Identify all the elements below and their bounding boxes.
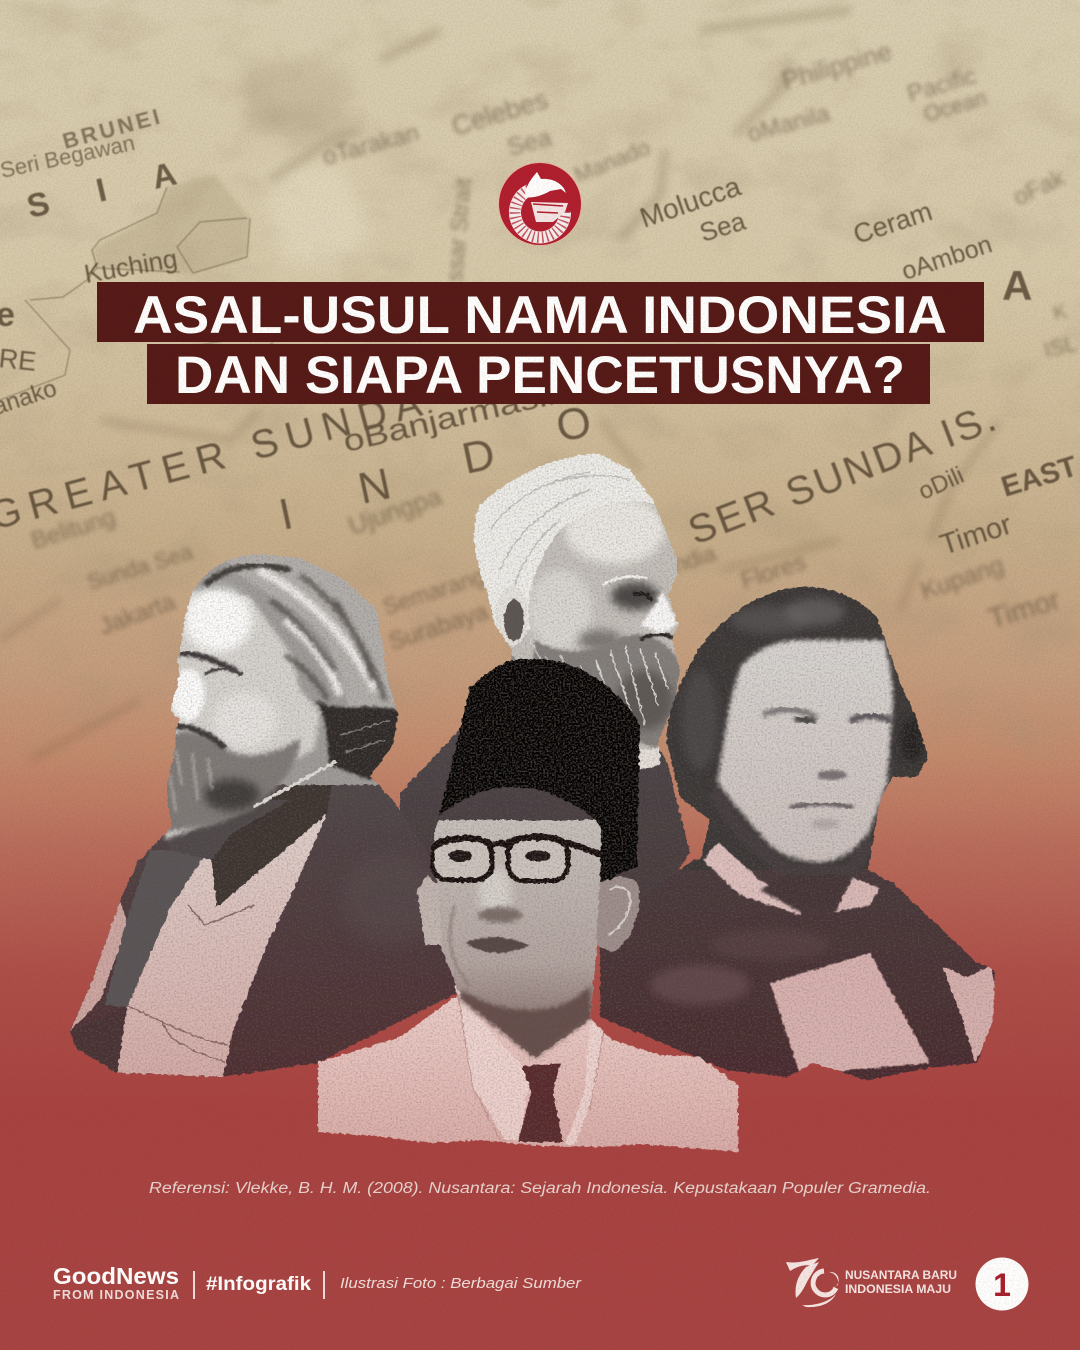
blurred map labels: Kupang: [917, 551, 1007, 606]
theme text: INDONESIA MAJU: [845, 1284, 951, 1296]
title: [97, 282, 984, 405]
logo: red circle with Garuda G: [498, 162, 582, 246]
blurred map labels: ISL: [1041, 331, 1079, 363]
footer left: brand and tags: [53, 1263, 582, 1302]
brand logotype: GoodNews: [53, 1263, 179, 1289]
blurred map labels: Philippine: [778, 36, 895, 96]
sharp map labels: Molucca: [636, 170, 745, 234]
footer right: anniversary logo and theme: [786, 1258, 957, 1307]
portrait: back centre man with white hair and beard: [400, 452, 690, 901]
sharp map labels: Kuching: [82, 243, 180, 289]
peci hat: [425, 659, 640, 882]
blurred map labels: Sea: [504, 123, 555, 162]
portrait: left man in profile with beard: [60, 545, 470, 1085]
sharp map labels: S I A: [23, 150, 199, 225]
blurred map labels: Flores: [738, 548, 809, 595]
white suit: [310, 985, 745, 1155]
blurred map labels: Ujungpa: [344, 481, 446, 541]
brand logotype: [53, 1263, 179, 1302]
blurred map labels: ssar Strait: [441, 176, 476, 282]
sharp map labels: [0, 103, 1080, 562]
neck and face: [433, 820, 605, 1058]
blurred map labels: Semarang: [380, 562, 488, 620]
blurred map labels: Timor: [985, 584, 1064, 636]
blurred map labels: Pacific: [904, 62, 980, 108]
blurred map labels: oManila: [745, 100, 833, 148]
sharp map labels: O: [552, 397, 596, 452]
portrait: right man with dark hair: [595, 580, 1000, 1085]
page number badge: 1: [993, 1267, 1011, 1303]
sharp map labels: oBanjarmasin: [340, 375, 570, 459]
blurred map labels: India: [664, 540, 719, 580]
reference citation: Referensi: Vlekke, B. H. M. (2008). Nusantara: Sejarah Indonesia. Kepustakaan Populer Gramedia.: [149, 1180, 931, 1197]
sharp map labels: Sea: [696, 205, 750, 248]
title bar: line 1: [97, 282, 984, 342]
blurred map labels: Belitung: [28, 504, 119, 555]
blurred map labels: oTarakan: [320, 119, 422, 171]
page number badge: [976, 1258, 1028, 1310]
brand logotype: FROM INDONESIA: [53, 1288, 179, 1302]
sharp map labels: A: [1002, 262, 1032, 309]
sharp map labels: oAmbon: [898, 230, 995, 286]
sharp map labels: N: [354, 459, 395, 514]
sharp map labels: BRUNEI: [60, 103, 165, 154]
blurred map labels: Ocean: [920, 85, 990, 127]
sharp map labels: I: [275, 489, 297, 540]
glasses: [432, 836, 602, 881]
sharp map labels: D: [458, 429, 499, 484]
hashtag: #Infografik: [206, 1274, 311, 1295]
theme text: NUSANTARA BARU: [845, 1270, 957, 1282]
blurred map labels: [28, 36, 1079, 656]
title line 2: DAN SIAPA PENCETUSNYA?: [175, 346, 905, 405]
blurred map labels: Manado: [571, 135, 654, 188]
sharp map labels: Ceram: [850, 196, 936, 250]
sharp map labels: Seri Begawan: [0, 130, 137, 183]
blurred map labels: Celebes: [448, 84, 551, 142]
blurred map labels: K: [1051, 300, 1070, 325]
map labels: [0, 36, 1080, 656]
necktie: [518, 1064, 563, 1142]
blurred map labels: Sunda Sea: [84, 539, 196, 595]
blurred map labels: Jakarta: [96, 588, 180, 641]
sharp map labels: Timor: [936, 509, 1016, 562]
title bar: line 2: [147, 344, 930, 404]
portrait collage: [60, 450, 1000, 1155]
title line 1: ASAL-USUL NAMA INDONESIA: [133, 286, 947, 345]
portrait: front man with peci and glasses: [310, 659, 745, 1155]
blurred map labels: Surabaya: [386, 598, 492, 656]
photo credit: Ilustrasi Foto : Berbagai Sumber: [340, 1275, 582, 1292]
ears: [417, 875, 442, 948]
sharp map labels: oDili: [914, 462, 968, 505]
theme text: [845, 1270, 957, 1296]
sharp map labels: SER SUNDA IS.: [682, 396, 1002, 553]
eyes: [448, 850, 551, 862]
blurred map labels: oFak: [1009, 164, 1070, 211]
sharp map labels: EAST: [998, 450, 1080, 504]
